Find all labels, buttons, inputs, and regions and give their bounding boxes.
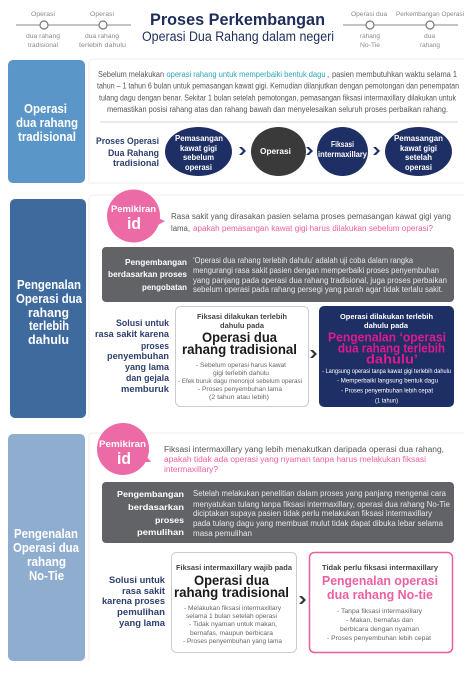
panel: operasi dua rahang tradisional: [8, 60, 85, 183]
box: introduction first: - Langsung operasi tanpa kawat gigi terlebih dahulu: [322, 368, 451, 375]
panel: operasi dua rahang tradisional: dua rahang: [16, 116, 78, 130]
panel: pengenalan no-tie: Pengenalan: [14, 527, 78, 541]
box: introduction first: - Proses penyembuhan lebih cepat: [341, 388, 433, 394]
right timeline: Operasi dua: [351, 11, 387, 18]
heading: solusi 1: yang lama: [125, 362, 170, 372]
heading: solusi 2: Solusi untuk: [109, 575, 166, 585]
text block: question 2: intermaxillary?: [164, 465, 219, 474]
right timeline: dua: [424, 33, 435, 40]
right timeline: Perkembangan Operasi: [396, 11, 464, 18]
callout: pengembangan pemulihan: [102, 482, 454, 543]
text block: intro paragraph: ,: [327, 70, 329, 79]
process step 3: Fiksasi: [331, 140, 354, 149]
box: traditional fixation: Fiksasi intermaxillary wajib pada: [176, 563, 293, 572]
right timeline: [343, 11, 464, 49]
arrow: [373, 147, 380, 155]
heading: proses operasi: Dua Rahang: [108, 148, 159, 158]
callout: pengembangan pemulihan: pemulihan: [137, 528, 184, 537]
process step 4: kawat gigi: [400, 144, 437, 153]
text block: intro paragraph: memastikan posisi rahang atas dan rahang bawah dan menyelesaikan seluruh proses perbaikan rahang.: [107, 105, 448, 114]
text block: question: lama,: [171, 224, 190, 233]
right timeline: No-Tie: [360, 42, 380, 49]
process step 3: intermaxillary: [318, 150, 368, 159]
callout: pengembangan pengobatan: ‘Operasi dua rahang terlebih dahulu’ adalah uji coba dalam rangka: [193, 256, 414, 265]
callout: pengembangan pemulihan: diciptakan supaya pasien tidak perlu melakukan fiksasi intermaxillary: [193, 509, 432, 518]
box: no-tie: Tidak perlu fiksasi intermaxillary: [322, 563, 439, 572]
heading: proses operasi: [96, 136, 159, 168]
box: traditional fixation: bernafas, maupun berbicara: [190, 630, 273, 637]
panel: operasi dua rahang tradisional: tradisional: [18, 130, 76, 144]
arrow: [239, 147, 246, 155]
panel: card outlines: [89, 59, 464, 661]
box: traditional fixation: rahang tradisional: [174, 585, 289, 600]
callout: pengembangan pengobatan: berdasarkan proses: [108, 270, 188, 279]
left timeline: tradisional: [28, 42, 59, 49]
box: traditional fixation: selama 1 bulan setelah operasi: [186, 613, 277, 620]
panel: pengenalan operasi terlebih dahulu: Pengenalan: [17, 278, 81, 292]
text block: question 2: apakah tidak ada operasi yang nyaman tanpa harus melakukan fiksasi: [164, 455, 426, 464]
left timeline: Operasi: [90, 11, 114, 18]
badge: pemikiran id: [107, 190, 165, 242]
box: introduction first: [319, 306, 454, 407]
box: no-tie: [310, 552, 452, 652]
arrow: [306, 147, 313, 155]
box: traditional before: gigi terlebih dahulu: [213, 370, 269, 377]
arrow: [310, 350, 317, 358]
process step 1: [165, 127, 232, 176]
text block: question: Rasa sakit yang dirasakan pasien selama proses pemasangan kawat gigi yang: [171, 212, 451, 221]
box: no-tie: - Makan, bernafas dan: [346, 617, 413, 624]
process step 4: [385, 127, 452, 176]
box: traditional before: rahang tradisional: [182, 342, 297, 357]
process step 1: sebelum: [183, 153, 214, 162]
box: introduction first: Pengenalan ‘operasi: [328, 330, 446, 344]
left timeline: Operasi: [31, 11, 55, 18]
heading: solusi 1: memburuk: [121, 384, 170, 394]
badge: pemikiran id: id: [127, 214, 141, 233]
panel: pengenalan operasi terlebih dahulu: rahang: [28, 306, 69, 320]
callout: pengembangan pemulihan: Pengembangan: [117, 490, 184, 499]
heading: solusi 2: pemulihan: [117, 607, 165, 617]
box: traditional fixation: - Proses penyembuhan yang lama: [183, 638, 282, 645]
right timeline: rahang: [420, 42, 440, 49]
heading: solusi 1: rasa sakit karena: [95, 329, 170, 339]
title: Proses Perkembangan: [150, 11, 325, 29]
heading: solusi 1: Solusi untuk: [116, 318, 170, 328]
box: traditional fixation: - Melakukan fiksasi intermaxillary: [184, 605, 282, 612]
process step 1: operasi: [185, 163, 212, 172]
callout: pengembangan pengobatan: yang panjang pada operasi dua rahang tradisional, juga proses perbaikan: [193, 276, 447, 285]
process step 4: operasi: [405, 163, 432, 172]
panel: pengenalan operasi terlebih dahulu: dahulu: [28, 333, 69, 347]
box: traditional before: - Sebelum operasi harus kawat: [196, 362, 286, 369]
panel: pengenalan operasi terlebih dahulu: terlebih: [29, 319, 69, 333]
title: [142, 11, 334, 44]
box: traditional fixation: Operasi dua: [194, 573, 269, 588]
callout: pengembangan pemulihan: masa pemulihan: [193, 529, 252, 538]
box: traditional before: Fiksasi dilakukan terlebih: [197, 312, 287, 321]
text block: question: [171, 212, 451, 233]
heading: solusi 1: [95, 318, 170, 394]
heading: solusi 2: rasa sakit: [122, 586, 165, 596]
text block: question: apakah pemasangan kawat gigi harus dilakukan sebelum operasi?: [193, 224, 434, 233]
arrow: [299, 596, 306, 604]
heading: proses operasi: tradisional: [113, 158, 159, 168]
process step 2: [251, 127, 306, 176]
panel: pengenalan no-tie: No-Tie: [29, 569, 64, 583]
text block: question 2: [164, 445, 444, 474]
panel: pengenalan no-tie: Operasi dua: [13, 541, 80, 555]
box: introduction first: Operasi dilakukan terlebih: [340, 312, 433, 321]
box: introduction first: (1 tahun): [375, 398, 398, 404]
panel: operasi dua rahang tradisional: Operasi: [24, 102, 67, 116]
callout: pengembangan pengobatan: mengurangi rasa sakit pasien dengan memperbaiki proses penyembuhan: [193, 266, 439, 275]
box: traditional before: dahulu pada: [220, 321, 265, 330]
text block: question 2: Fiksasi intermaxillary yang lebih menakutkan daripada operasi dua rahang,: [164, 445, 444, 454]
heading: solusi 1: penyembuhan: [107, 351, 169, 361]
callout: pengembangan pemulihan: proses: [155, 516, 185, 525]
box: traditional before: (2 tahun atau lebih): [209, 394, 269, 401]
box: no-tie: berbicara dengan nyaman: [340, 626, 419, 633]
heading: proses operasi: Proses Operasi: [96, 136, 159, 146]
box: introduction first: dahulu’: [366, 352, 418, 366]
box: introduction first: - Memperbaiki langsung bentuk dagu: [337, 378, 438, 384]
callout: pengembangan pemulihan: berdasarkan: [128, 503, 184, 512]
left timeline: dua rahang: [85, 33, 119, 40]
text block: intro paragraph: Sebelum melakukan: [98, 70, 164, 79]
heading: solusi 2: yang lama: [119, 618, 166, 628]
box: no-tie: Pengenalan operasi: [322, 573, 438, 588]
box: introduction first: dua rahang terlebih: [338, 342, 445, 356]
process step 3: [317, 127, 368, 176]
box: traditional before: Operasi dua: [202, 330, 277, 345]
heading: solusi 1: proses: [141, 341, 169, 351]
badge: pemikiran id: Pemikiran: [111, 204, 156, 215]
panel: pengenalan operasi terlebih dahulu: [10, 199, 86, 418]
badge: pemikiran id 2: [97, 423, 151, 475]
panel: pengenalan operasi terlebih dahulu: Operasi dua: [16, 292, 83, 306]
process step 4: Pemasangan: [394, 134, 443, 143]
box: traditional before: - Efek buruk dagu menonjol sebelum operasi: [178, 378, 302, 385]
box: introduction first: dahulu pada: [364, 321, 409, 330]
badge: pemikiran id 2: Pemikiran: [99, 439, 146, 450]
callout: pengembangan pengobatan: [102, 247, 454, 302]
box: traditional before: [176, 306, 308, 406]
text block: intro paragraph: operasi rahang untuk memperbaiki bentuk dagu: [166, 70, 326, 79]
box: traditional before: - Proses penyembuhan lama: [198, 386, 282, 393]
heading: solusi 1: dan gejala: [126, 373, 170, 383]
left timeline: [16, 11, 131, 49]
process step 2: Operasi: [260, 147, 291, 156]
callout: pengembangan pemulihan: Setelah melakukan penelitian dalam proses yang panjang mengenai cara: [193, 489, 447, 498]
callout: pengembangan pemulihan: pada tulang dagu yang membuat mulut tidak dapat dibuka lebar selama: [193, 519, 444, 528]
box: no-tie: - Proses penyembuhan lebih cepat: [327, 635, 431, 642]
text block: intro paragraph: [97, 70, 459, 114]
callout: pengembangan pengobatan: sebelum operasi pada rahang persegi yang parah agar tidak terlalu sakit.: [193, 285, 443, 294]
box: traditional fixation: - Tidak nyaman untuk makan,: [189, 621, 277, 628]
box: no-tie: - Tanpa fiksasi intermaxillary: [337, 608, 423, 615]
left timeline: terlebih dahulu: [79, 42, 126, 49]
callout: pengembangan pengobatan: pengobatan: [142, 283, 187, 292]
process step 4: setelah: [405, 153, 432, 162]
panel: pengenalan no-tie: rahang: [27, 555, 66, 569]
box: traditional fixation: [172, 552, 296, 652]
text block: intro paragraph: pasien membutuhkan waktu selama 1: [332, 70, 458, 79]
box: no-tie: dua rahang No-tie: [327, 587, 433, 602]
panel: pengenalan no-tie: [8, 434, 85, 661]
heading: solusi 2: [102, 575, 166, 628]
process step 1: kawat gigi: [180, 144, 217, 153]
badge: pemikiran id 2: id: [117, 449, 131, 468]
right timeline: rahang: [360, 33, 380, 40]
process step 1: Pemasangan: [175, 134, 223, 143]
title: Operasi Dua Rahang dalam negeri: [142, 29, 334, 44]
callout: pengembangan pemulihan: menyatukan tulang tanpa fiksasi intermaxillary, operasi dua rahang No-Tie: [193, 500, 450, 509]
left timeline: dua rahang: [26, 33, 60, 40]
callout: pengembangan pengobatan: Pengembangan: [125, 258, 187, 267]
heading: solusi 2: karena proses: [102, 596, 165, 606]
